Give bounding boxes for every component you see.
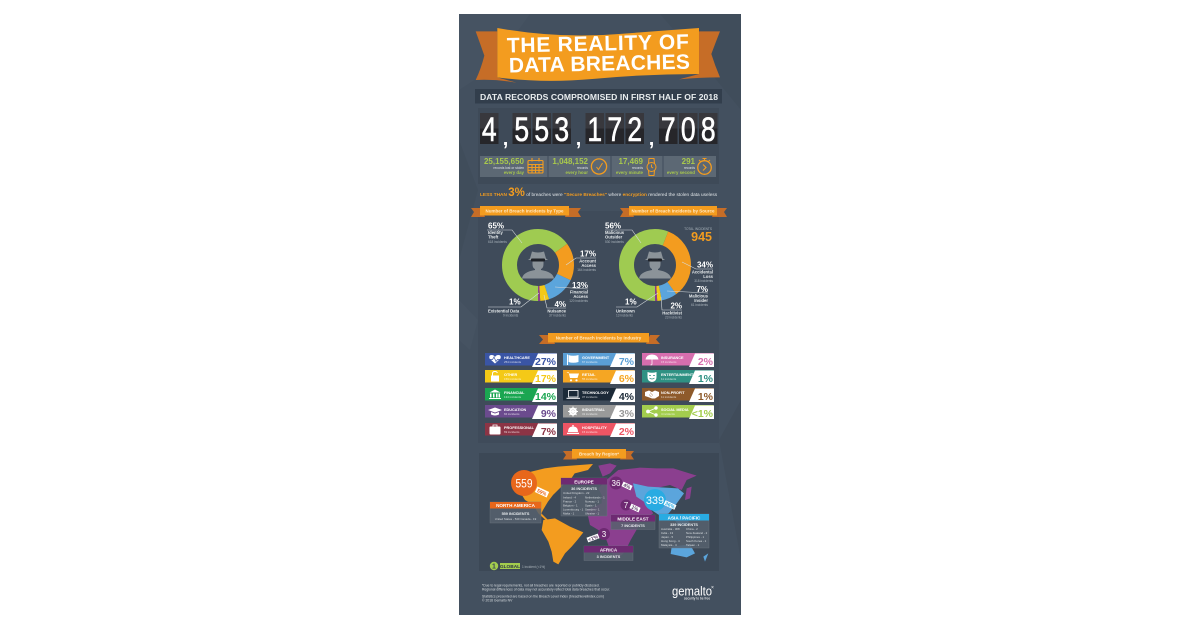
donut chart: incidents by source: 945 [691, 230, 712, 244]
ribbon: incidents by industry [539, 333, 660, 344]
donut chart: incidents by type: Identity [488, 230, 504, 235]
technology: 37 incidents [582, 395, 598, 399]
donut chart: incidents by type: 120 incidents [569, 299, 588, 303]
North America callout: United States - 540 Canada - 19 [495, 517, 537, 521]
entertainment: 1% [698, 373, 714, 385]
donut chart: incidents by type: Theft [488, 234, 499, 240]
Europe callout: United Kingdom - 22 [563, 491, 590, 495]
ribbon: breach by region: Breach by Region* [579, 452, 619, 456]
stats strip [480, 156, 716, 177]
donut chart: incidents by type: 13% [572, 281, 588, 290]
donut chart: incidents by source: 13 incidents [616, 314, 633, 318]
global legend [490, 562, 545, 570]
donut chart: incidents by type: 1% [509, 298, 521, 306]
financial: 14% [535, 391, 557, 403]
ribbon: breach incidents by type: Number of Breach Incidents by Type [486, 208, 564, 214]
hospitality [563, 423, 635, 438]
flip counter: 4,553,172,708: 7 [661, 111, 676, 149]
donut chart: incidents by source: Accidental [692, 270, 713, 274]
North America callout: NORTH AMERICA [496, 503, 536, 508]
Europe callout: Spain - 1 [585, 504, 597, 508]
North America callout: 559 [515, 478, 533, 491]
education: 84 incidents [504, 412, 520, 416]
Europe callout: Ireland - 4 [563, 496, 576, 500]
social media [642, 405, 714, 420]
subtitle bar [475, 89, 722, 104]
Africa circle and tag: 3 [602, 530, 607, 539]
stat: every hour: every hour [566, 170, 588, 175]
social media: <1% [692, 408, 714, 420]
ribbon: breach incidents by source [620, 206, 727, 217]
Asia Pacific circle and tag: 339 [646, 495, 664, 507]
labels: type [487, 230, 596, 308]
stat: every day: every day [504, 170, 525, 175]
stat: every minute: records [632, 166, 643, 170]
stat: every second: every second [667, 170, 695, 175]
donut chart: incidents by type: Financial [570, 290, 588, 294]
donut chart: incidents by type: Nuisance [547, 308, 567, 314]
donut chart: incidents by source: 56% [605, 222, 621, 230]
donut chart: incidents by source: TOTAL INCIDENTS [684, 227, 712, 231]
donut chart: incidents by type: Existential Data [488, 308, 520, 314]
flip counter: 4,553,172,708: 3 [554, 111, 569, 149]
stat: every hour: 1,048,152 [552, 157, 589, 166]
professional: 69 incidents [504, 430, 520, 434]
healthcare: 27% [535, 356, 557, 368]
entertainment [642, 370, 714, 385]
retail: 6% [619, 373, 635, 385]
Africa callout: 3 INCIDENTS [597, 555, 621, 559]
gemalto logo: security to be free [684, 596, 710, 600]
Asia Pacific callout: India - 13 [661, 531, 673, 535]
secure breaches statement: LESS THAN 3% of breaches were "Secure Breaches" where encryption rendered the stolen data useless [480, 187, 718, 199]
donut chart: incidents by source: Hacktivist [662, 310, 683, 316]
region: South America [542, 518, 583, 564]
Asia Pacific callout: Philippines - 1 [686, 535, 705, 539]
donut chart: incidents by type: 65% [488, 222, 504, 230]
insurance [642, 353, 714, 368]
icon: clock [591, 159, 607, 174]
global legend: 1 incident (<1%) [522, 565, 545, 569]
other: OTHER [504, 373, 518, 377]
footnotes: Regional differences of data may not accurately reflect total data breaches that occur. [482, 588, 610, 592]
footnotes: Statistics presented are based on the Breach Level Index (breachlevelindex.com) [482, 594, 604, 598]
education: EDUCATION [504, 408, 527, 412]
background panel [459, 14, 741, 615]
Asia Pacific circle and tag: 36% [664, 501, 676, 511]
ribbon: incidents by industry: Number of Breach Incidents by Industry [556, 336, 642, 340]
donut chart: incidents by source: Loss [703, 274, 714, 279]
Europe circle and tag: 36 [612, 479, 621, 488]
icon: calendar [528, 158, 543, 173]
Asia Pacific callout: South Korea - 1 [686, 539, 707, 543]
region: Asia Pacific [633, 483, 684, 517]
flip counter: 4,553,172,708: 7 [607, 111, 622, 149]
donut chart: incidents by type: 164 incidents [577, 268, 596, 272]
stat: every day [484, 157, 525, 175]
donut chart: incidents by source: Insider [694, 298, 708, 303]
technology: TECHNOLOGY [582, 391, 609, 395]
icon: wristwatch [647, 158, 656, 176]
Europe callout: Ukraine - 1 [585, 512, 600, 516]
flip counter: 4,553,172,708: 0 [681, 111, 696, 149]
ribbon: breach by region [563, 449, 634, 460]
region: Europe, Africa and Middle East [587, 468, 697, 560]
Asia Pacific callout: Australia - 308 [661, 527, 680, 531]
stat: every hour: records [577, 166, 588, 170]
region: Oceania [671, 544, 695, 557]
Africa circle and tag: <1% [587, 534, 600, 543]
Africa callout: AFRICA [600, 548, 618, 552]
Africa callout [584, 546, 633, 560]
stat: every minute: 17,469 [619, 157, 644, 166]
donut chart: incidents by source: Unknown [616, 308, 635, 314]
retail: 55 incidents [582, 377, 598, 381]
healthcare: 254 incidents [504, 360, 522, 364]
Asia Pacific callout: ASIA / PACIFIC [668, 516, 701, 520]
professional [485, 423, 557, 438]
retail: RETAIL [582, 373, 596, 377]
world map [512, 463, 708, 564]
donut chart: incidents by source: Outsider [605, 234, 623, 240]
social media: 4 incidents [661, 412, 675, 416]
labels: source [605, 230, 713, 310]
Europe callout: Sweden - 1 [585, 508, 600, 512]
non-profit: NON-PROFIT [661, 391, 685, 395]
Asia Pacific callout: 339 INCIDENTS [670, 523, 698, 527]
Europe callout: 36 INCIDENTS [571, 487, 597, 491]
Middle East circle and tag [620, 500, 641, 514]
flip counter: 4,553,172,708: 4 [482, 111, 497, 149]
footnotes: *Due to legal requirements, not all breaches are reported or publicly disclosed. [482, 584, 600, 588]
Asia Pacific callout: China - 2 [686, 527, 698, 531]
financial: 134 incidents [504, 395, 522, 399]
flip counter: 4,553,172,708: , [649, 128, 654, 150]
stat: every day: 25,155,650 [484, 157, 525, 166]
donut chart: incidents by source: Malicious [689, 294, 709, 298]
entertainment: 11 incidents [661, 377, 677, 381]
icon: hacker silhouette [522, 252, 554, 278]
Middle East callout: MIDDLE EAST [617, 516, 649, 522]
global legend: GLOBAL [500, 564, 520, 570]
Asia Pacific circle and tag [644, 489, 676, 511]
non-profit: 1% [698, 391, 714, 403]
stat: every second: records [684, 166, 695, 170]
ribbon: breach incidents by type [471, 206, 581, 217]
education: 9% [541, 408, 557, 420]
flip counter: 4,553,172,708: 5 [514, 111, 529, 149]
donut chart: incidents by type: 9 incidents [503, 314, 519, 318]
global legend: 1 [492, 564, 496, 570]
financial: FINANCIAL [504, 391, 525, 395]
government [563, 353, 635, 368]
Europe circle and tag: 4% [622, 482, 632, 491]
donut chart: incidents by source: 7% [696, 285, 708, 294]
stat: every second: 291 [682, 157, 696, 166]
footnotes: © 2018 Gemalto NV [482, 598, 513, 602]
flip counter: 4,553,172,708: , [576, 128, 581, 150]
stat: every hour [552, 157, 589, 175]
Asia Pacific callout: Hong Kong - 4 [661, 539, 680, 543]
entertainment: ENTERTAINMENT [661, 373, 694, 377]
Asia Pacific callout: New Zealand - 2 [686, 531, 708, 535]
government: 67 incidents [582, 360, 598, 364]
healthcare: HEALTHCARE [504, 356, 530, 360]
insurance: INSURANCE [661, 356, 684, 360]
donut chart: incidents by source: 34% [697, 260, 713, 270]
technology: 4% [619, 391, 635, 403]
Europe circle and tag [610, 476, 633, 492]
Europe callout: Norway - 1 [585, 500, 599, 504]
North America callout [490, 470, 549, 523]
stat: every minute [616, 157, 644, 175]
Europe callout: Netherlands - 1 [585, 496, 605, 500]
title banner: DATA BREACHES [509, 51, 690, 77]
gemalto logo: × [711, 585, 714, 591]
Middle East circle and tag: 1% [630, 504, 640, 513]
title banner: THE REALITY OF [507, 31, 689, 57]
donut chart: incidents by type: Account [579, 258, 597, 264]
Middle East callout: 7 INCIDENTS [621, 524, 645, 528]
region: Japan and islands [685, 487, 692, 500]
industrial: 31 incidents [582, 412, 598, 416]
stat: every day: records lost or stolen [493, 166, 524, 170]
Europe callout: Luxembourg - 1 [563, 508, 584, 512]
Europe callout: Belgium - 1 [563, 504, 578, 508]
Asia Pacific callout [659, 514, 709, 548]
donut chart: incidents by source: 318 incidents [694, 279, 713, 283]
insurance: 2% [698, 356, 714, 368]
insurance: 15 incidents [661, 360, 677, 364]
Europe callout: Malta - 1 [563, 512, 575, 516]
donut chart: incidents by source: 2% [670, 302, 682, 310]
flip counter: 4,553,172,708: 1 [587, 111, 602, 149]
gemalto logo: gemalto [672, 584, 712, 598]
donut chart: incidents by type: 4% [554, 300, 566, 309]
professional: 7% [541, 426, 557, 438]
Middle East circle and tag: 7 [624, 501, 629, 510]
Asia Pacific callout: Japan - 5 [661, 535, 673, 539]
healthcare [485, 353, 557, 368]
non-profit [642, 388, 714, 403]
donut chart: incidents by type: Access [581, 263, 597, 268]
hospitality: HOSPITALITY [582, 426, 607, 430]
donut chart: incidents by source: 23 incidents [665, 316, 682, 320]
donut chart: incidents by source: 1% [625, 298, 637, 306]
other: 17% [535, 373, 557, 385]
financial [485, 388, 557, 403]
flip counter: 4,553,172,708: 5 [534, 111, 549, 149]
Europe callout: EUROPE [574, 480, 594, 484]
icon: hacker silhouette [639, 252, 671, 278]
stat: every second [667, 157, 696, 175]
other [485, 370, 557, 385]
retail [563, 370, 635, 385]
flip counter: 4,553,172,708: 2 [627, 111, 642, 149]
flip counter: 4,553,172,708: , [503, 128, 508, 150]
flip counter: 4,553,172,708: 8 [701, 111, 716, 149]
region: Greenland [598, 463, 617, 477]
industry bars [485, 353, 714, 438]
map panel [479, 453, 719, 571]
footnotes [482, 584, 610, 602]
industrial: INDUSTRIAL [582, 408, 606, 412]
government: 7% [619, 356, 635, 368]
technology [563, 388, 635, 403]
Europe callout: France - 2 [563, 500, 577, 504]
region: North America [512, 464, 593, 523]
donut chart: incidents by type [487, 222, 597, 318]
non-profit: 11 incidents [661, 395, 677, 399]
Europe callout [561, 478, 607, 516]
other: 159 incidents [504, 377, 522, 381]
tag: 59%: 59% [536, 488, 548, 498]
social media: SOCIAL MEDIA [661, 408, 689, 412]
Middle East callout [611, 515, 655, 530]
donut chart: incidents by type: Access [573, 294, 589, 299]
ribbon: breach incidents by source: Number of Breach Incidents by Source [631, 208, 715, 214]
icon: stopwatch [698, 158, 711, 174]
Asia Pacific callout: Malaysia - 4 [661, 543, 677, 547]
education [485, 405, 557, 420]
Africa circle and tag [587, 528, 610, 544]
North America callout: 559 INCIDENTS [502, 512, 530, 516]
industrial [563, 405, 635, 420]
title banner [476, 28, 720, 83]
donut chart: incidents by type: 618 incidents [488, 240, 507, 244]
hospitality: 2% [619, 426, 635, 438]
donut chart: incidents by type: 17% [580, 250, 596, 258]
subtitle bar: DATA RECORDS COMPROMISED IN FIRST HALF OF 2018 [480, 92, 718, 102]
donut chart: incidents by source: 61 incidents [691, 303, 708, 307]
donut chart: incidents by source [605, 222, 714, 320]
donut chart: incidents by type: 37 incidents [549, 314, 566, 318]
Asia Pacific callout: Taiwan - 1 [686, 543, 700, 547]
stat: every minute: every minute [616, 170, 644, 175]
government: GOVERNMENT [582, 356, 610, 360]
donut chart: incidents by source: Malicious [605, 230, 625, 235]
hospitality: 15 incidents [582, 430, 598, 434]
flip counter: 4,553,172,708 [480, 111, 718, 150]
professional: PROFESSIONAL [504, 426, 535, 430]
donut chart: incidents by source: 530 incidents [605, 240, 624, 244]
industrial: 3% [619, 408, 635, 420]
